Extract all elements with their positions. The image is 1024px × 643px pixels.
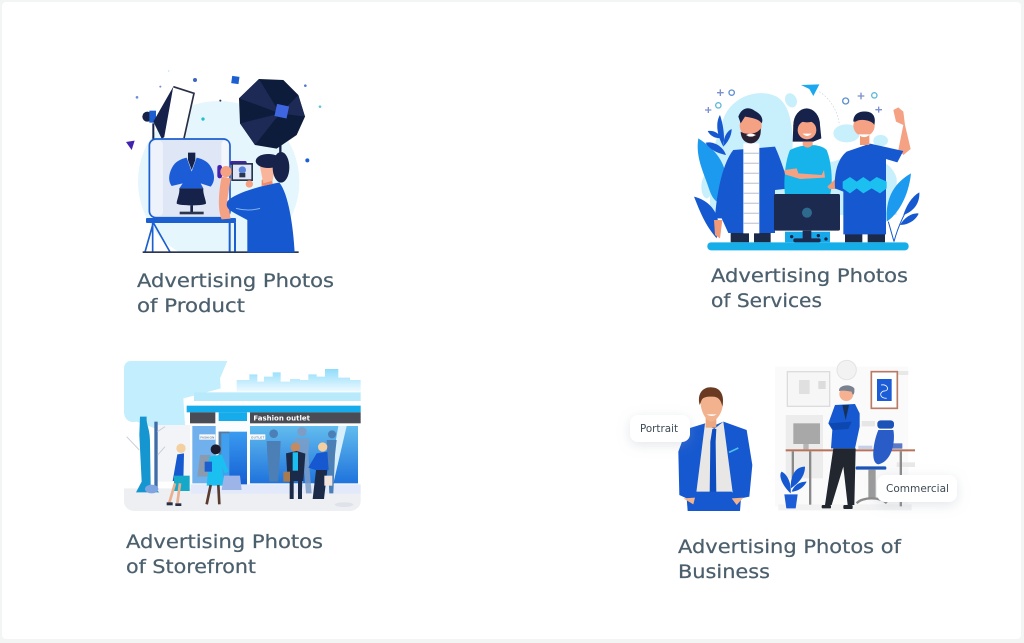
- illustration: team of three: [694, 84, 919, 250]
- heading: services: Advertising Photos: [711, 265, 908, 287]
- panel: storefront: [124, 361, 361, 578]
- businessman portrait: [678, 387, 752, 511]
- sign text: Fashion outlet: [253, 414, 311, 422]
- office chair: [856, 420, 894, 503]
- right man: [827, 107, 911, 242]
- heading: product: of Product: [137, 295, 245, 317]
- heading: storefront: Advertising Photos: [126, 531, 323, 553]
- office background: [775, 360, 915, 510]
- icon: softbox light: [142, 87, 194, 140]
- studio table: [143, 218, 299, 253]
- heading: business: Business: [678, 561, 770, 583]
- panel: product photography: [120, 70, 334, 317]
- shopper left: [167, 444, 190, 506]
- tag: Commercial: Commercial: [886, 483, 949, 495]
- heading: storefront: of Storefront: [126, 556, 256, 578]
- tree canopy: [124, 361, 227, 429]
- woman: [784, 108, 832, 242]
- monitor: [774, 194, 840, 242]
- framed picture: [871, 372, 897, 408]
- panel: services team: [694, 84, 919, 312]
- left leaves: [694, 115, 732, 238]
- heading: product: Advertising Photos: [137, 270, 334, 292]
- skyline: [237, 369, 361, 392]
- building: [157, 406, 361, 494]
- two men talking: [283, 442, 332, 499]
- shopper middle: [205, 444, 242, 504]
- ground: [124, 488, 361, 511]
- desk with monitor: [786, 423, 915, 506]
- illustration: office and suited man: [678, 360, 915, 511]
- paper plane and marks: [705, 84, 882, 125]
- heading: business: Advertising Photos of: [678, 536, 902, 558]
- floor bar: [707, 242, 909, 250]
- decorative sparkles: [126, 70, 321, 162]
- panel: business: [630, 360, 957, 583]
- tag: Portrait: Portrait: [640, 423, 678, 435]
- businessman standing: [822, 385, 860, 509]
- building: OUTLET: [251, 435, 265, 439]
- tag: Commercial: [877, 475, 957, 502]
- photographer: [217, 152, 295, 253]
- icon: umbrella light: [239, 79, 305, 157]
- right leaves: [887, 173, 919, 242]
- heading: services: of Services: [711, 290, 822, 312]
- photo box with blouse on mannequin: [149, 139, 230, 218]
- tree trunks: [127, 417, 165, 493]
- illustration: fashion outlet street: [124, 361, 361, 511]
- illustration: photographer in studio: [120, 70, 333, 263]
- potted plant: [780, 467, 807, 508]
- tag: Portrait: [630, 415, 690, 442]
- left man: [714, 108, 790, 242]
- building: FASHION: [200, 435, 214, 439]
